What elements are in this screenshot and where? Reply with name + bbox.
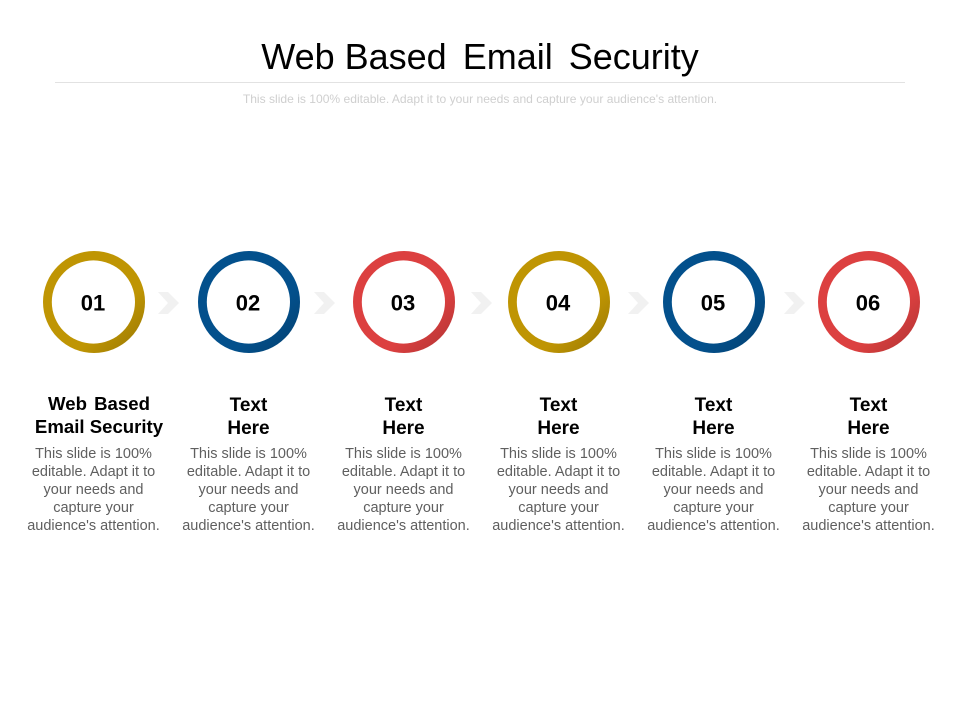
text 04: audience's attention.: [492, 518, 625, 534]
heading 05: [692, 395, 735, 439]
text 06: This slide is 100%: [810, 446, 927, 462]
text 05: [647, 446, 780, 534]
text 04: capture your: [518, 500, 599, 516]
chevron 1: [158, 292, 179, 314]
heading 02: Here: [227, 418, 270, 439]
text 01: audience's attention.: [27, 518, 160, 534]
heading 04: [537, 395, 580, 439]
chevron 5: [784, 292, 805, 314]
text 01: This slide is 100%: [35, 446, 152, 462]
text 06: audience's attention.: [802, 518, 935, 534]
text 01: editable. Adapt it to: [32, 464, 155, 480]
heading 06: Text: [850, 395, 887, 416]
heading 02: Text: [230, 395, 267, 416]
heading 04: Text: [540, 395, 577, 416]
text 03: editable. Adapt it to: [342, 464, 465, 480]
chevron 2: [314, 292, 335, 314]
heading 01: [35, 393, 163, 437]
ring 04: 04: [546, 290, 571, 316]
text 06: [802, 446, 935, 534]
ring 01: [43, 251, 145, 353]
chevron 3: [471, 292, 492, 314]
text 04: This slide is 100%: [500, 446, 617, 462]
text 01: your needs and: [44, 482, 143, 498]
heading 05: Here: [692, 418, 735, 439]
text 05: This slide is 100%: [655, 446, 772, 462]
text 06: your needs and: [819, 482, 918, 498]
text 04: your needs and: [509, 482, 608, 498]
text 04: [492, 446, 625, 534]
text 04: editable. Adapt it to: [497, 464, 620, 480]
text 02: [182, 446, 315, 534]
text 05: capture your: [673, 500, 754, 516]
ring 05: [663, 251, 765, 353]
heading 01: Web Based: [48, 393, 150, 414]
ring 06: [818, 251, 920, 353]
text 06: capture your: [828, 500, 909, 516]
text 03: This slide is 100%: [345, 446, 462, 462]
text 05: editable. Adapt it to: [652, 464, 775, 480]
title: Web Based Email Security: [261, 36, 699, 77]
heading 04: Here: [537, 418, 580, 439]
text 03: [337, 446, 470, 534]
text 05: your needs and: [664, 482, 763, 498]
text 06: editable. Adapt it to: [807, 464, 930, 480]
text 03: audience's attention.: [337, 518, 470, 534]
text 01: capture your: [53, 500, 134, 516]
heading 01: Email Security: [35, 416, 163, 437]
subtitle: This slide is 100% editable. Adapt it to your needs and capture your audience's attention.: [243, 92, 717, 106]
ring 02: 02: [236, 290, 260, 316]
heading 06: Here: [847, 418, 890, 439]
text 02: your needs and: [199, 482, 298, 498]
ring 03: [353, 251, 455, 353]
chevron 4: [628, 292, 649, 314]
text 03: your needs and: [354, 482, 453, 498]
ring 06: 06: [856, 290, 880, 316]
ring 01: 01: [81, 290, 105, 316]
text 05: audience's attention.: [647, 518, 780, 534]
heading 03: [382, 395, 425, 439]
heading 03: Text: [385, 395, 422, 416]
text 02: editable. Adapt it to: [187, 464, 310, 480]
ring 05: 05: [701, 290, 725, 316]
ring 03: 03: [391, 290, 415, 316]
text 01: [27, 446, 160, 534]
text 02: capture your: [208, 500, 289, 516]
heading 06: [847, 395, 890, 439]
ring 04: [508, 251, 610, 353]
text 02: This slide is 100%: [190, 446, 307, 462]
ring 02: [198, 251, 300, 353]
text 02: audience's attention.: [182, 518, 315, 534]
heading 03: Here: [382, 418, 425, 439]
heading 02: [227, 395, 270, 439]
heading 05: Text: [695, 395, 732, 416]
text 03: capture your: [363, 500, 444, 516]
